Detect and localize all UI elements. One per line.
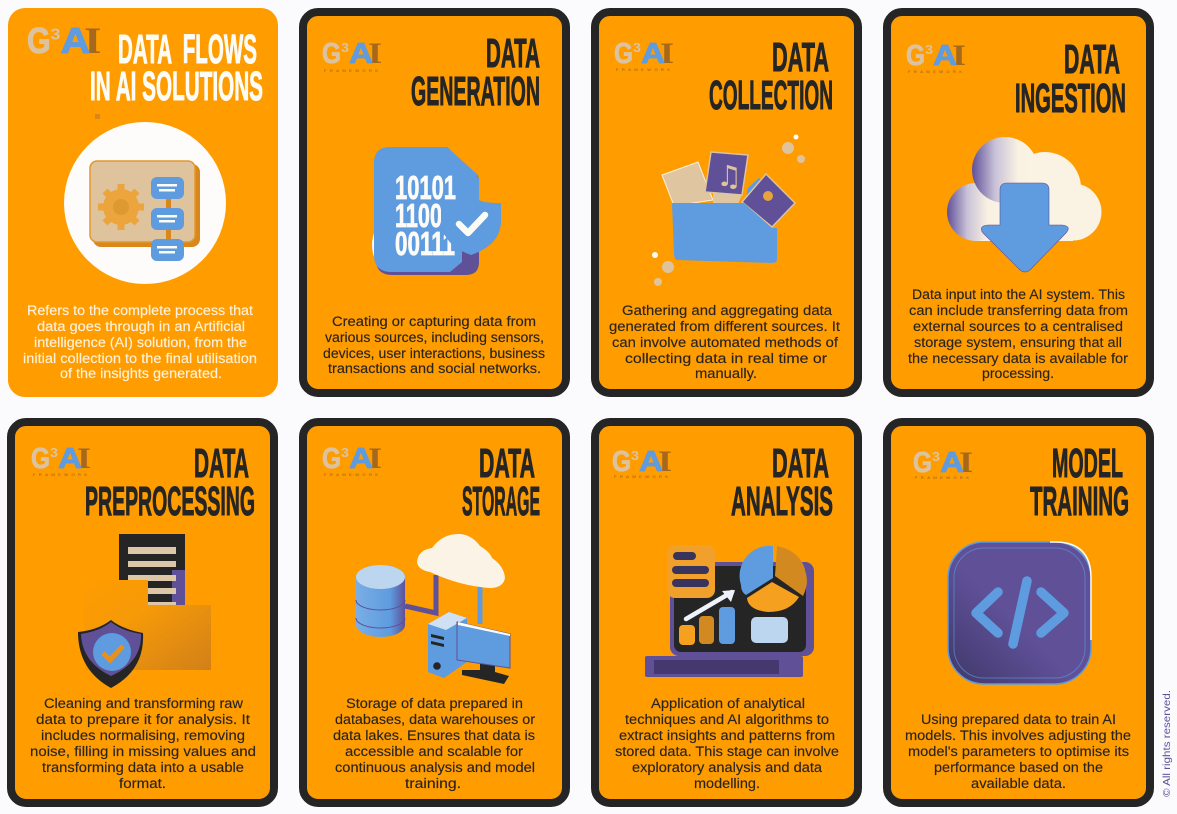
- icon: folder with files: ♫: [716, 159, 742, 193]
- panel: data collection: COLLECTION: [709, 72, 833, 118]
- description: Refers to the complete process that: [27, 303, 253, 318]
- panel: data generation: [303, 12, 566, 393]
- logo: FRAMEWORK: [915, 475, 969, 480]
- panel: data storage: STORAGE: [462, 478, 540, 524]
- description: devices, user interactions, business: [323, 346, 545, 361]
- description: Cleaning and transforming raw: [44, 696, 243, 711]
- logo: A: [639, 446, 663, 478]
- logo: I: [368, 442, 382, 475]
- heading: [1030, 440, 1129, 524]
- heading: DATA: [479, 440, 535, 486]
- description: Data input into the AI system. This: [912, 287, 1125, 302]
- description: [30, 696, 256, 791]
- icon: code tile: [948, 542, 1091, 684]
- description: Gathering and aggregating data: [622, 303, 833, 318]
- heading: [709, 34, 833, 118]
- heading: [462, 440, 540, 524]
- description: databases, data warehouses or: [335, 712, 536, 727]
- description: transforming data into a usable: [42, 760, 244, 775]
- heading: [731, 440, 833, 524]
- panel: data preprocessing: PREPROCESSING: [85, 478, 255, 524]
- panel: data flows intro: [8, 8, 278, 397]
- description: storage system, ensuring that all: [914, 335, 1122, 350]
- logo: [27, 20, 101, 61]
- icon: folder with files: [652, 134, 805, 286]
- panel: data storage: [303, 422, 566, 803]
- icon: binary document with shield: [372, 147, 501, 275]
- description: [23, 303, 257, 381]
- logo: I: [658, 445, 672, 478]
- logo: FRAMEWORK: [324, 472, 378, 477]
- logo: 3: [50, 445, 58, 460]
- heading: [411, 30, 540, 114]
- icon: analytics laptop: [645, 545, 814, 677]
- heading: DATA: [486, 30, 540, 76]
- description: [323, 314, 545, 376]
- panel: data ingestion: [887, 12, 1150, 393]
- description: exploratory analysis and data: [632, 760, 823, 775]
- description: Application of analytical: [651, 696, 805, 711]
- logo: A: [58, 443, 82, 475]
- heading: DATA: [194, 440, 249, 486]
- description: includes normalising, removing: [41, 728, 245, 743]
- description: [905, 712, 1131, 791]
- logo: I: [959, 446, 973, 479]
- description: the necessary data is available for: [908, 351, 1129, 366]
- logo: 3: [631, 448, 639, 463]
- logo: A: [349, 38, 373, 70]
- description: Using prepared data to train AI: [921, 712, 1116, 727]
- description: transactions and social networks.: [328, 361, 541, 376]
- description: accessible and scalable for: [345, 744, 524, 759]
- logo: FRAMEWORK: [33, 472, 87, 477]
- panel: data collection: [595, 12, 858, 393]
- heading: DATA: [1064, 36, 1120, 82]
- heading: [85, 440, 255, 524]
- description: continuous analysis and model: [335, 760, 535, 775]
- logo: 3: [633, 40, 641, 55]
- description: data lakes. Ensures that data is: [333, 728, 535, 743]
- logo: FRAMEWORK: [614, 474, 668, 479]
- description: collecting data in real time or: [625, 351, 828, 366]
- description: of the insights generated.: [60, 366, 222, 381]
- icon: folder with document and shield: [78, 534, 211, 688]
- description: [615, 696, 839, 791]
- icon: gear panel in white circle: [64, 122, 226, 284]
- logo: FRAMEWORK: [324, 68, 378, 73]
- description: can involve automated methods of: [612, 335, 838, 350]
- logo: FRAMEWORK: [908, 69, 962, 74]
- logo: I: [368, 37, 382, 70]
- description: data to prepare it for analysis. It: [36, 712, 250, 727]
- description: external sources to a centralised: [913, 319, 1123, 334]
- description: processing.: [982, 366, 1054, 381]
- description: extract insights and patterns from: [619, 728, 835, 743]
- description: stored data. This stage can involve: [615, 744, 839, 759]
- icon: binary document with shield: 00111: [395, 225, 455, 262]
- description: generated from different sources. It: [609, 319, 840, 334]
- description: Creating or capturing data from: [332, 314, 536, 329]
- panel: data generation: GENERATION: [411, 68, 540, 114]
- logo: A: [940, 447, 964, 479]
- panel: model training: [887, 422, 1150, 803]
- icon: cloud download: [947, 137, 1102, 272]
- logo: I: [77, 442, 91, 475]
- logo: [906, 39, 966, 74]
- logo: G: [31, 443, 50, 475]
- logo: A: [60, 20, 90, 61]
- logo: [614, 37, 674, 72]
- title: IN AI SOLUTIONS: [90, 63, 263, 109]
- description: model's parameters to optimise its: [908, 744, 1129, 759]
- logo: FRAMEWORK: [616, 67, 670, 72]
- logo: 3: [925, 42, 933, 57]
- heading: DATA: [772, 440, 829, 486]
- description: [609, 303, 840, 381]
- logo: G: [612, 446, 631, 478]
- logo: [322, 37, 382, 73]
- heading: DATA: [772, 34, 829, 80]
- logo: G: [27, 20, 51, 61]
- logo: [913, 446, 973, 480]
- description: available data.: [971, 776, 1066, 791]
- logo: 3: [51, 25, 61, 43]
- logo: G: [614, 38, 633, 70]
- description: Storage of data prepared in: [346, 696, 523, 711]
- description: can include transferring data from: [909, 303, 1128, 318]
- description: models. This involves adjusting the: [905, 728, 1131, 743]
- description: format.: [119, 776, 166, 791]
- description: data goes through in an Artificial: [37, 319, 245, 334]
- title: DATA FLOWS: [118, 26, 257, 72]
- logo: [322, 442, 382, 477]
- logo: G: [322, 443, 341, 475]
- description: training.: [405, 776, 461, 791]
- description: initial collection to the final utilisation: [23, 351, 257, 366]
- logo: I: [952, 39, 966, 72]
- description: [908, 287, 1129, 381]
- heading: [1015, 36, 1126, 121]
- description: modelling.: [694, 776, 760, 791]
- title: [90, 26, 263, 109]
- copyright note: © All rights reserved.: [1161, 690, 1173, 797]
- logo: I: [660, 37, 674, 70]
- logo: G: [913, 447, 932, 479]
- description: [333, 696, 536, 791]
- icon: binary document with shield: 1100: [395, 197, 442, 234]
- logo: A: [349, 443, 373, 475]
- description: performance based on the: [934, 760, 1103, 775]
- logo: G: [322, 38, 341, 70]
- logo: 3: [341, 445, 349, 460]
- description: intelligence (AI) solution, from the: [34, 335, 247, 350]
- heading: ANALYSIS: [731, 478, 833, 524]
- logo: [612, 445, 672, 479]
- logo: A: [641, 38, 665, 70]
- panel: data preprocessing: [11, 422, 274, 803]
- description: techniques and AI algorithms to: [625, 712, 829, 727]
- icon: binary document with shield: 10101: [395, 169, 456, 206]
- logo: I: [84, 20, 101, 61]
- description: manually.: [695, 366, 757, 381]
- logo: 3: [341, 40, 349, 55]
- logo: [31, 442, 91, 477]
- logo: A: [933, 40, 957, 72]
- description: noise, filling in missing values and: [30, 744, 256, 759]
- description: various sources, including sensors,: [325, 330, 544, 345]
- panel: data analysis: [595, 422, 858, 803]
- logo: 3: [932, 449, 940, 464]
- logo: G: [906, 40, 925, 72]
- icon: database, cloud and computer: [356, 534, 510, 684]
